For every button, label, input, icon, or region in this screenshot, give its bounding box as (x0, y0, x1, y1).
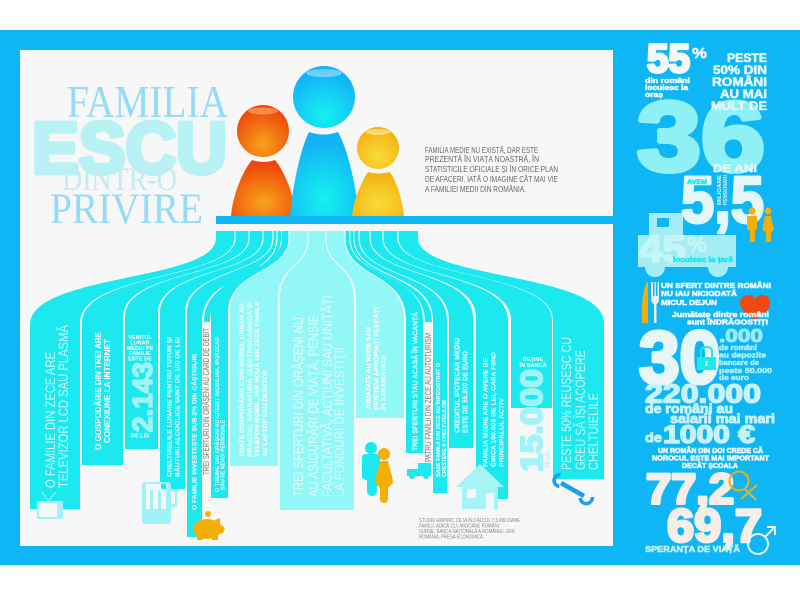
intro text: A FAMILIEI MEDII DIN ROMÂNIA. (425, 184, 526, 194)
stat: peste 50%: 50% DIN (713, 65, 767, 77)
stat: 55%: % (692, 45, 707, 62)
stream text: venit lunar: LUNAR (130, 340, 150, 346)
stat: peste 50%: MULT DE (711, 101, 767, 113)
stream text: rude: JUMĂTATE AU RUDE SAU (364, 327, 372, 410)
stream text: rude: ÎN STRĂINĂTATE (378, 354, 388, 411)
stream text: card de debit: TREI SFERTURI DIN ORĂȘENI AU CARD DE DEBIT (202, 328, 211, 475)
stat: 30.000 depozite (639, 316, 772, 399)
stat: 5,5 milioane pensionari: 5,5 (681, 162, 764, 236)
stream text: avere: PRINCIPALUL ACTIV (498, 397, 506, 467)
stream text: cheltuieli: CREȘTERE A CHELTUIELILOR (442, 400, 448, 477)
stream text: credit (214, 337, 226, 492)
stream text: gospodarii: TOATE GOSPODĂRIILE DIN MEDIUL URBAN AU, (239, 302, 246, 457)
stream text: credit ipotecar: CREDITUL IPOTECAR MEDIU (454, 338, 462, 433)
sources: SURSE: BANCA NAȚIONALĂ A ROMÂNIEI, GFK (419, 528, 515, 535)
stat: micul dejun: MICUL DEJUN (661, 298, 717, 307)
stat: 220.000 salarii: 220.000 (645, 378, 761, 408)
title: DINTR-O (62, 162, 177, 198)
stat: noroc (652, 446, 770, 470)
stream text: televizor (42, 324, 71, 488)
number: 2.143: 2.143 (127, 362, 158, 432)
stat: indragostiti: Jumătate dintre români (672, 310, 769, 319)
title: ESCU (32, 109, 227, 189)
icon: piggy bank (193, 511, 225, 540)
intro text: STATISTICILE OFICIALE ȘI ÎN ORICE PLAN (425, 164, 558, 174)
stat: noroc: DECÂT ȘCOALA (682, 461, 738, 470)
stream text: venit lunar: MEDIU PE (127, 346, 154, 352)
stat: indragostiti: sunt ÎNDRĂGOSTIȚI (687, 318, 768, 326)
stream text: cheltuieli (434, 363, 448, 477)
stat: 30.000 depozite: de euro (719, 373, 749, 382)
stat: 55% (645, 37, 707, 99)
intro text: FAMILIA MEDIE NU EXISTĂ, DAR ESTE (425, 145, 538, 155)
stream text: tutun: BĂUTURI ALCOOLICE SUNT DE 100 DE LEI (172, 337, 182, 477)
stat: peste 50%: ROMÂNI (712, 76, 767, 89)
stat: 220.000 salarii (645, 378, 775, 449)
stream text: venit lunar (127, 335, 154, 440)
stream text: tutun (166, 337, 182, 477)
stream text: cheltuieli 50%: PESTE 50% REUȘESC CU (558, 337, 574, 470)
title: FAMILIA (67, 76, 228, 127)
label: speranta de viata: SPERANȚA DE VIAȚĂ (645, 544, 740, 554)
stream text: autoturism: PATRU FAMILII DIN ZECE AU AUTOTURISM (424, 333, 433, 462)
icon: wrench (552, 474, 594, 506)
stream text: asigurari: AU ASIGURĂRI DE VIAȚĂ, PENSIE (305, 315, 321, 497)
stream text: avere (482, 352, 506, 467)
stream text: in banca: DEȚINE (523, 357, 543, 363)
icon: car (407, 463, 431, 479)
stream text: avere: CIRCA 100.000 DE LEI, CASA FIIND (490, 352, 498, 467)
stream text: in banca: ÎN BANCĂ (519, 361, 546, 369)
stream text: cheltuieli: ȘASE FAMILII DIN ZECE AU ÎNREGISTRAT O (434, 363, 442, 477)
stat: 45% la tara: 45 (639, 229, 686, 271)
stream text: gospodarii: PRACTIC, APARATURĂ ELECTROCASNICĂ ȘI (247, 302, 254, 457)
stream text: asigurari: TREI SFERTURI DIN ORĂȘENI NU (290, 317, 306, 497)
stream text: televizor: TELEVIZOR LCD SAU PLASMĂ (55, 324, 71, 488)
stat: 30.000 depozite: de români (719, 343, 757, 352)
stat: noroc: UN ROMÂN DIN DOI CREDE CĂ (658, 446, 763, 455)
icon: male symbol (748, 527, 775, 554)
stat: 220.000 salarii: salarii mai mari (670, 412, 775, 426)
stat: noroc: NOROCUL ESTE MAI IMPORTANT (652, 456, 770, 462)
sources: STUDIU EMPIRIC CE IA ÎN CALCUL 7,5 MILIOANE (419, 517, 520, 524)
stream text: asigurari: LA FONDURI DE INVESTIȚII (331, 347, 347, 497)
stream text: asigurari: FACULTATIVĂ, ACȚIUNI SAU UNITĂȚI (319, 295, 335, 497)
family figures (231, 66, 404, 216)
icon: heart (740, 295, 770, 320)
stat: 30.000 depozite: .000 (719, 326, 763, 346)
stat: 45% la tara (639, 229, 734, 271)
stream text: tutun: CHELTUIELILE LUNARE PENTRU TUTUN ȘI (166, 337, 174, 477)
stream text: venit lunar: ESTE DE (128, 356, 152, 362)
stream text: internet: CONEXIUNE LA INTERNET (102, 338, 112, 443)
icon: couple (362, 442, 393, 503)
number: 15.000: 15.000 (514, 369, 549, 472)
stat: 30.000 depozite: bancare de (719, 358, 759, 367)
stat: 55%: oraș (645, 90, 663, 99)
stream text: investeste: O FAMILIE INVESTEȘTE SUB 2% DIN CÂȘTIGURI (190, 354, 198, 510)
stream text: vacanta: TREI SFERTURI STAU ACASĂ ÎN VACANȚĂ (410, 312, 420, 451)
title (32, 76, 228, 233)
stream text: internet (93, 332, 112, 450)
stream text: rude (364, 307, 388, 411)
stat: 30.000 depozite: peste 50.000 (719, 366, 772, 375)
stat: 55%: 55 (647, 37, 690, 81)
stream text: gospodarii (239, 302, 269, 457)
stream text: televizor: O FAMILIE DIN ZECE ARE (42, 352, 58, 488)
title: PRIVIRE (50, 186, 203, 233)
stream text: venit lunar: DE LEI (131, 434, 149, 440)
stat: 55%: locuiesc la (645, 83, 689, 92)
intro text: DE AFACERI. IATĂ O IMAGINE CÂT MAI VIE (425, 174, 558, 184)
stat: 220.000 salarii: de (645, 431, 662, 445)
stream text: gospodarii: TELEFON MOBIL, IAR NOUĂ DIN ZECE FAMILII (254, 302, 261, 457)
stream text: cheltuieli 50% (558, 337, 601, 470)
stat: micul dejun: UN SFERT DINTRE ROMÂNI (661, 281, 771, 290)
stat: 5,5 milioane pensionari: PENSIONARI (723, 174, 729, 205)
icon: pensioner couple (747, 208, 774, 242)
stat: 220.000 salarii: de români au (645, 402, 733, 416)
stream text: rude: PRIETENI APROPIAȚI PLECAȚI (374, 307, 380, 410)
stat: 220.000 salarii: 1000 € (663, 421, 755, 449)
flow streams (30, 231, 604, 537)
stat: 30.000 depozite: au depozite (719, 350, 766, 360)
stat: peste 50%: PESTE (727, 53, 767, 65)
stat: 5,5 milioane pensionari: MILIOANE (717, 174, 723, 205)
stat: 45% la tara: locuiesc la țară (673, 255, 734, 264)
sources: FAMILII, ADICĂ 21,5 MILIOANE ROMÂNI. (419, 522, 500, 530)
stream text: avere: FAMILIA MEDIE ARE O AVERE DE (482, 357, 490, 467)
stat: 77,2: 77,2 (646, 466, 734, 514)
stream text: credit ipotecar: ESTE DE 55.800 DE EURO (462, 350, 470, 433)
stream text: cheltuieli 50%: GREU SĂ ÎȘI ACOPERE (572, 350, 588, 470)
stat: 5,5 milioane pensionari: AVEM (687, 179, 707, 186)
stream text: asigurari (290, 295, 347, 497)
stream text: credit: SAU DE NEVOI PERSONALE (220, 419, 226, 490)
intro text: PREZENTĂ ÎN VIAȚA NOASTRĂ, ÎN (425, 154, 539, 164)
stream text: gospodarii: AU LAPTOP SAU DESKTOP (263, 370, 269, 457)
stat: 45% la tara: % (687, 231, 707, 257)
stream text: internet: O GOSPODĂRIE DIN TREI ARE (93, 332, 103, 450)
icon: television (37, 492, 63, 519)
stream text: credit: O TREIME DIN ORĂȘENI AU CREDIT IMOBILIAR, IPOTECAR (214, 337, 221, 492)
stat: 30.000 depozite: 30 (639, 316, 720, 399)
icon: padlock (697, 347, 716, 370)
stream text: venit lunar: FAMILIE (129, 351, 151, 357)
icon: knife and fork (642, 282, 659, 323)
icon: truck (638, 213, 736, 277)
stat: 69,7: 69,7 (667, 500, 762, 552)
icon: house (456, 464, 504, 509)
intro text (425, 145, 558, 194)
stream text: cheltuieli 50%: CHELTUIELILE (585, 393, 601, 470)
sources (419, 517, 520, 540)
icon: beer mug (142, 482, 177, 524)
stream text: in banca (519, 357, 546, 369)
stat: micul dejun: NU IAU NICIODATĂ (661, 289, 738, 298)
stat: 36 de ani: 36 (637, 82, 765, 192)
stat: micul dejun (661, 281, 771, 307)
shelf bar (216, 216, 613, 224)
label: de lei: DE LEI (545, 452, 551, 468)
stat: 55%: din români (645, 76, 690, 85)
stream text: venit lunar: VENITUL (128, 335, 152, 341)
stream text: credit ipotecar (454, 338, 470, 433)
stat: peste 50% (711, 53, 767, 113)
stat: indragostiti (672, 310, 769, 326)
sources: ROMÂNIA, PRESA ECONOMICĂ. (419, 534, 484, 540)
stat: 36 de ani: DE ANI (713, 163, 757, 175)
icon: female symbol (730, 472, 757, 500)
stat: peste 50%: AU MAI (720, 89, 767, 101)
